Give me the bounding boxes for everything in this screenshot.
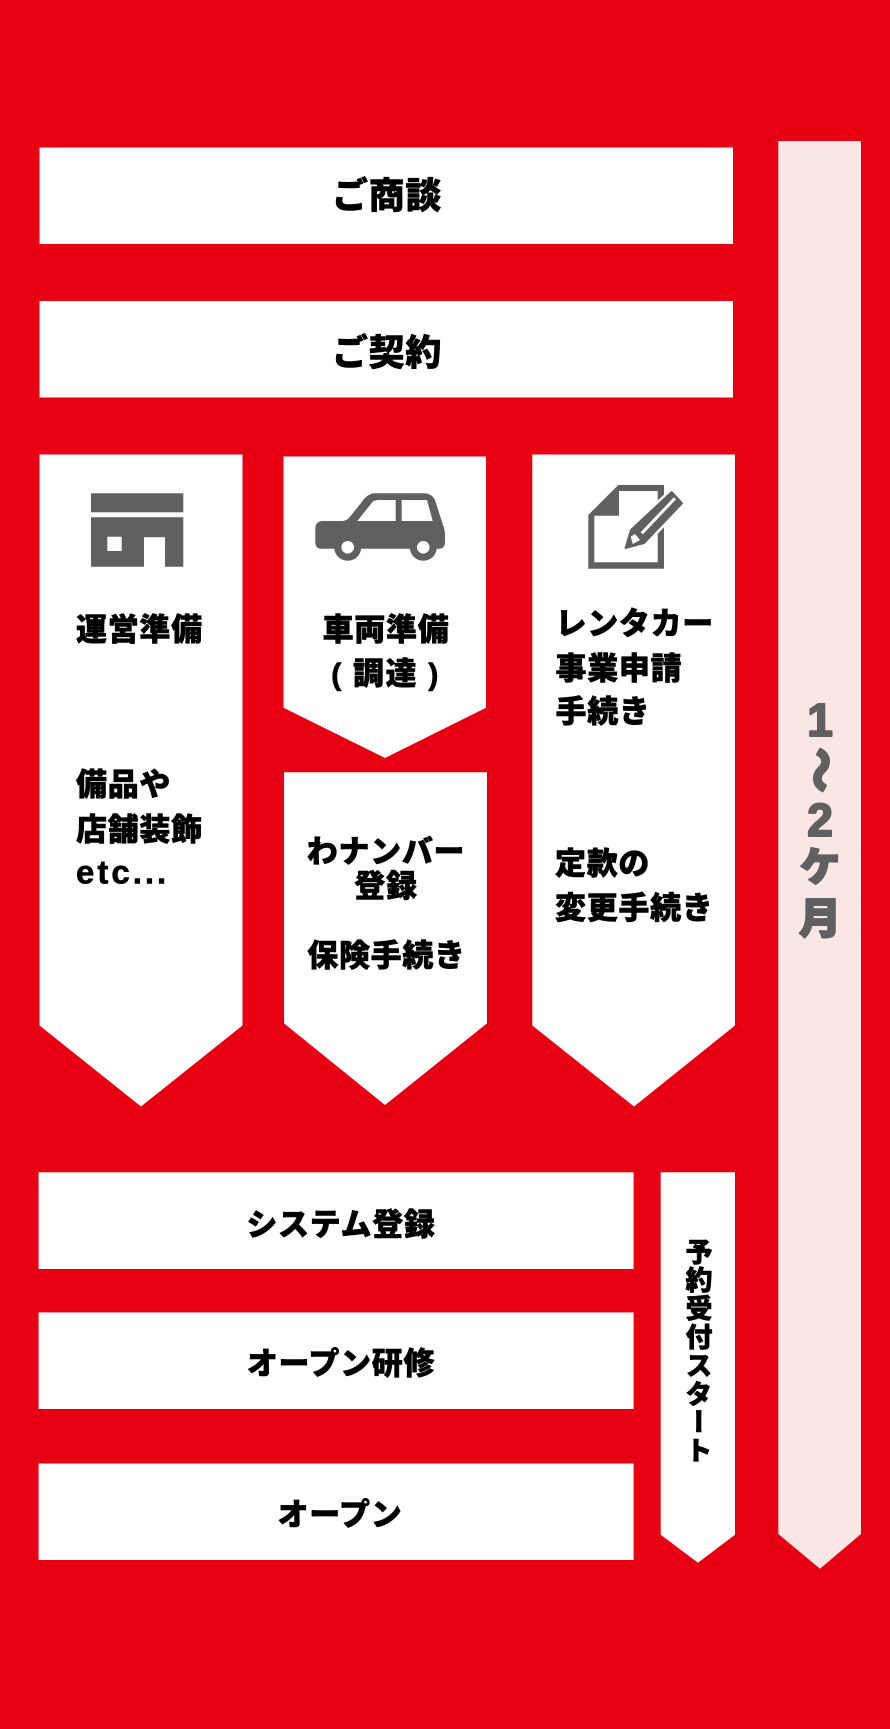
- text: 定款の変更手続き: [555, 846, 714, 926]
- label: 1〜2ケ月: 〜: [794, 747, 846, 793]
- icon: document and pencil: [588, 485, 683, 569]
- step: オープン: オープン: [278, 1498, 402, 1532]
- text: わナンバー登録: 登録: [354, 869, 418, 904]
- panel: わナンバー登録・保険手続き: [284, 772, 487, 1105]
- text: わナンバー登録: わナンバー: [307, 834, 465, 870]
- heading: レンタカー事業申請手続き: 事業申請: [556, 652, 682, 686]
- label: 1〜2ケ月: 2: [807, 794, 833, 846]
- text: わナンバー登録: [307, 834, 465, 904]
- text: 定款の変更手続き: 変更手続き: [555, 891, 714, 926]
- step: ご契約: ご契約: [332, 332, 442, 373]
- step: オープン研修: オープン研修: [247, 1346, 435, 1382]
- icon: store: [91, 493, 183, 567]
- timeline band: 1〜2ヶ月: [778, 141, 861, 1569]
- step: オープン: [39, 1464, 634, 1560]
- label: 1〜2ケ月: 月: [799, 896, 841, 942]
- text: 保険手続き: 保険手続き: [307, 938, 466, 974]
- step: ご商談: [40, 148, 733, 244]
- step: ご契約: [40, 301, 733, 398]
- heading: レンタカー事業申請手続き: [556, 606, 714, 730]
- heading: 運営準備: 運営準備: [76, 612, 203, 648]
- text: 備品や店舗装飾 etc: 店舗装飾: [76, 812, 203, 848]
- heading: 車両準備（調達）: [323, 612, 449, 692]
- step: システム登録: [39, 1172, 634, 1269]
- step: オープン研修: [39, 1312, 634, 1409]
- panel: 車両準備: [284, 456, 486, 758]
- text: 備品や店舗装飾 etc: [76, 768, 203, 890]
- label: 1〜2ケ月: [794, 694, 846, 942]
- panel: 予約受付スタート: [661, 1172, 735, 1563]
- label: 1〜2ケ月: 1: [807, 694, 833, 746]
- text: 定款の変更手続き: 定款の: [555, 846, 650, 882]
- heading: 車両準備（調達）: 車両準備: [323, 612, 449, 648]
- text: 備品や店舗装飾 etc: 備品や: [76, 768, 171, 802]
- text: 備品や店舗装飾 etc: etc...: [76, 854, 169, 890]
- step: システム登録: システム登録: [246, 1208, 436, 1242]
- panel: 予約受付スタート: 予約受付スタート: [682, 1238, 712, 1465]
- heading: 車両準備（調達）: ( 調達 ): [331, 656, 440, 692]
- label: 1〜2ケ月: ケ: [800, 846, 840, 890]
- step: ご商談: ご商談: [332, 175, 442, 216]
- icon: car: [315, 493, 445, 561]
- panel: レンタカー事業申請手続き: [532, 454, 735, 1106]
- heading: レンタカー事業申請手続き: 手続き: [556, 694, 651, 730]
- panel: 運営準備: [40, 454, 242, 1106]
- heading: レンタカー事業申請手続き: レンタカー: [556, 606, 714, 642]
